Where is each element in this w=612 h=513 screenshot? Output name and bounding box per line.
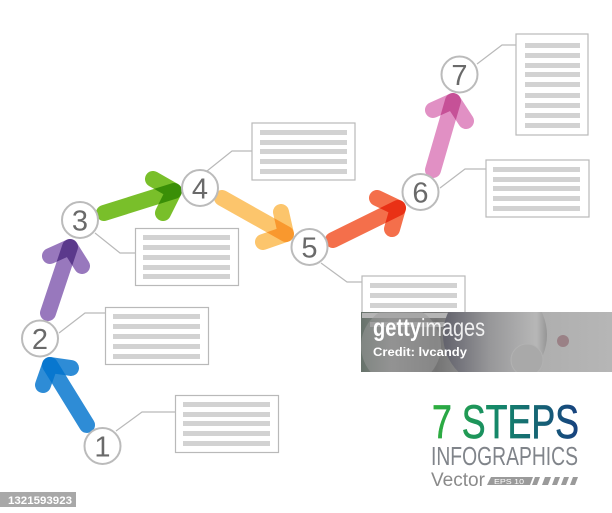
image id tag [0, 492, 76, 507]
text box: step 4 [252, 123, 355, 180]
watermark band: images [421, 314, 485, 342]
node 1 [84, 428, 120, 464]
title: 7 steps infographics vector: EPS 10 [494, 479, 524, 486]
node 4: 4 [192, 174, 208, 206]
connector lines [59, 45, 516, 431]
node 3 [62, 202, 98, 238]
node 5: 5 [301, 232, 318, 264]
text box: step 6 [486, 160, 589, 217]
node 3: 3 [72, 206, 88, 238]
arrow: step 5 to 6 [333, 198, 398, 240]
text box: step 3 [136, 228, 238, 286]
watermark band: Credit: lvcandy [373, 345, 467, 359]
node 2: 2 [32, 324, 48, 356]
arrow: step 6 to 7 [433, 101, 466, 170]
text box: step 5 [362, 276, 465, 333]
watermark band: getty [373, 314, 421, 342]
arrow: step 3 to 4 [104, 179, 174, 213]
node 4 [182, 170, 218, 206]
arrow: step 2 to 3 [48, 247, 82, 313]
title: 7 steps infographics vector [431, 395, 579, 491]
node 2 [22, 320, 58, 356]
node 5 [292, 229, 328, 265]
text box: step 7 [516, 34, 588, 135]
arrow: step 4 to 5 [222, 198, 286, 242]
text box: step 1 [176, 396, 278, 452]
arrow: step 1 to 2 [43, 365, 87, 425]
node 7 [442, 56, 478, 92]
node 6: 6 [412, 178, 429, 210]
node 7: 7 [451, 60, 468, 92]
image id tag: 1321593923 [8, 495, 72, 507]
title: 7 steps infographics vector: Vector [431, 470, 486, 491]
text box: step 2 [106, 308, 208, 364]
node 6 [402, 174, 438, 210]
watermark band [361, 283, 612, 387]
node 1: 1 [94, 432, 111, 464]
